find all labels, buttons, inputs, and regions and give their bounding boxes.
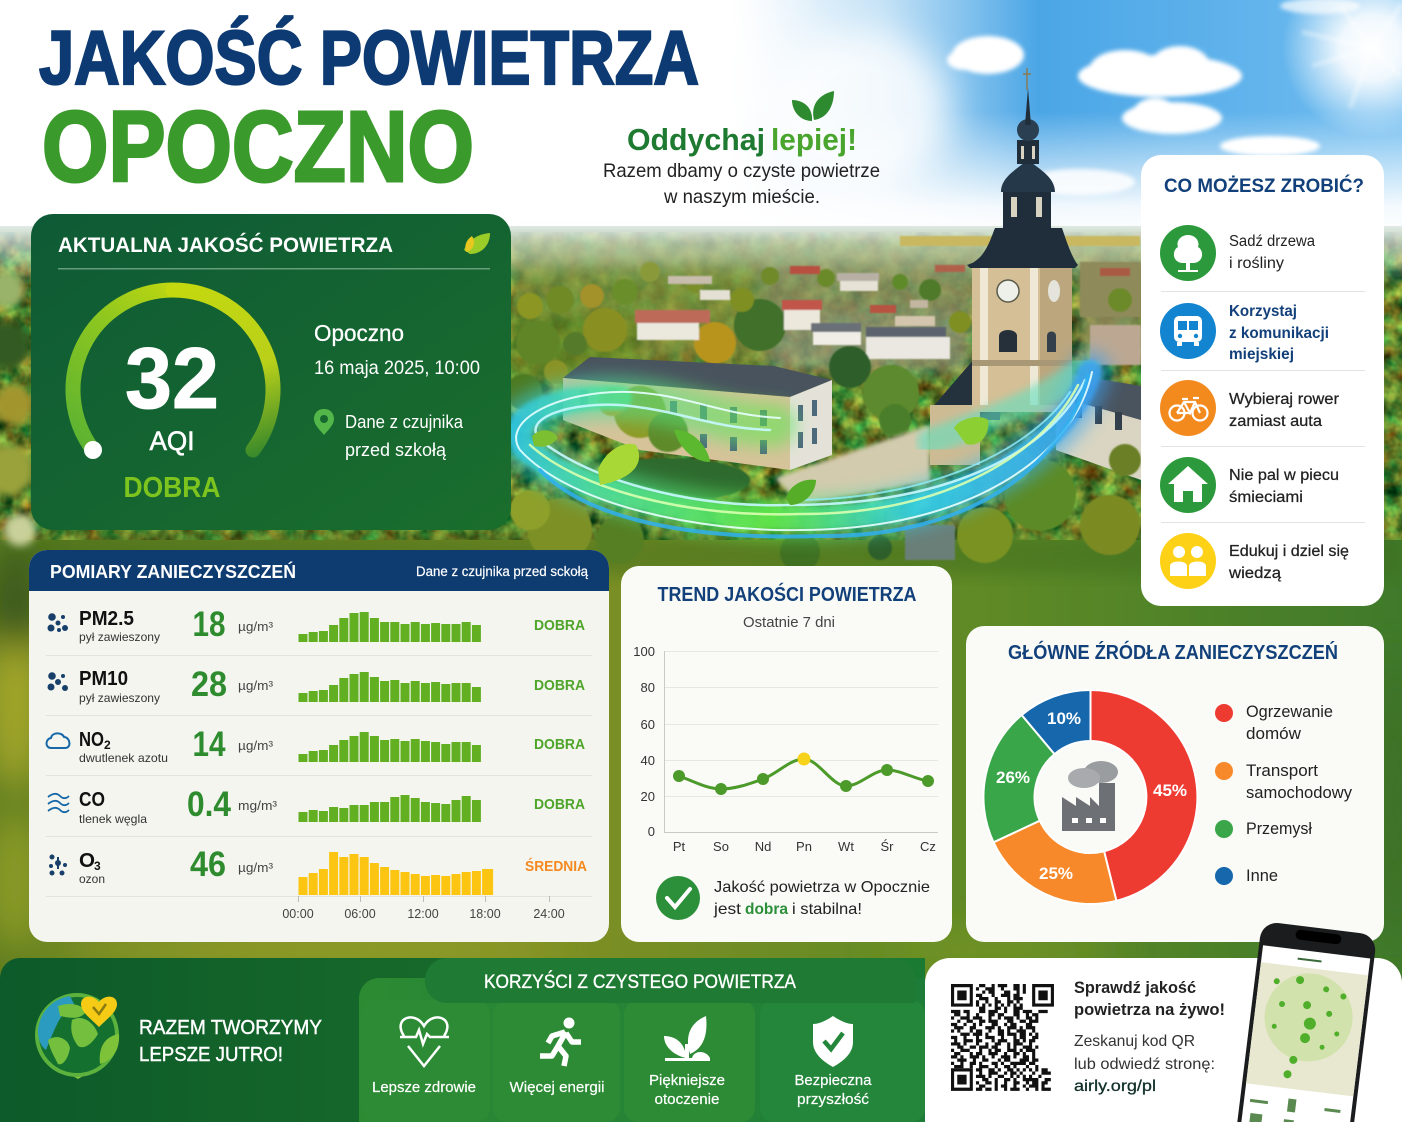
- row: PM2.5: 18: [192, 605, 226, 644]
- row: O3: ŚREDNIA: [525, 857, 587, 875]
- tip: bicycle: Wybieraj rower: [1229, 391, 1339, 408]
- time axis: 12:00: [407, 907, 439, 921]
- row: PM10: µg/m³: [238, 679, 273, 693]
- panel: pollutant measurements: Dane z czujnika przed sckołą: [416, 564, 588, 579]
- air swirl: [516, 368, 1092, 537]
- tagline: w naszym mieście.: [663, 186, 820, 208]
- time axis: 24:00: [533, 907, 565, 921]
- benefit: more energy: [510, 1018, 604, 1096]
- row: PM10: PM10: [79, 668, 128, 690]
- tagline: lepiej!: [771, 122, 857, 157]
- row: PM2.5: [48, 605, 585, 644]
- line chart: Nd: [755, 839, 771, 854]
- panel: live check QR: [925, 921, 1402, 1122]
- panel: action tips: [1141, 155, 1384, 606]
- benefit: better health: Lepsze zdrowie: [372, 1079, 476, 1096]
- clouds: [947, 0, 1360, 195]
- row: NO2: 2: [104, 738, 111, 752]
- tip: education: Edukuj i dziel się: [1229, 543, 1349, 560]
- donut chart: 45%: [1153, 781, 1187, 800]
- AQI gauge: DOBRA: [124, 472, 221, 504]
- panel: pollutant measurements: POMIARY ZANIECZYSZCZEŃ: [50, 561, 296, 582]
- benefit: safe future: [794, 1016, 872, 1108]
- line chart: Pt: [673, 839, 686, 854]
- row: CO: mg/m³: [238, 799, 277, 813]
- status note: dobra: [745, 901, 788, 918]
- legend: [1215, 703, 1353, 885]
- row: NO2: dwutlenek azotu: [79, 751, 168, 765]
- legend: samochodowy: [1246, 784, 1353, 802]
- tip: plant trees: [1160, 225, 1315, 281]
- legend: Przemysł: [1246, 820, 1312, 838]
- tip: public transport: Korzystaj: [1229, 303, 1297, 320]
- icon: earth heart: [37, 995, 119, 1079]
- legend: Inne: [1246, 867, 1278, 885]
- row: O3: ozon: [79, 872, 105, 886]
- icon: factory: [1062, 761, 1118, 831]
- row: PM10: DOBRA: [534, 677, 585, 694]
- panel: pollution sources: GŁÓWNE ŹRÓDŁA ZANIECZYSZCZEŃ: [1008, 640, 1338, 664]
- row: PM2.5: PM2.5: [79, 608, 134, 630]
- school building: [563, 357, 832, 470]
- QR text: powietrza na żywo!: [1074, 1000, 1225, 1019]
- panel: current air quality: AKTUALNA JAKOŚĆ POWIETRZA: [58, 233, 393, 257]
- panel: bottom benefits band: [0, 958, 925, 1122]
- tagline: [603, 91, 880, 208]
- panel: pollutant measurements: [29, 550, 609, 942]
- line chart: 80: [641, 680, 655, 695]
- line chart: Cz: [920, 839, 936, 854]
- title: [39, 16, 699, 203]
- QR text: Sprawdź jakość: [1074, 978, 1196, 997]
- icon: leaf: [464, 233, 490, 254]
- row: CO: CO: [79, 789, 105, 811]
- church: [930, 68, 1141, 480]
- town houses and trees: [506, 236, 1141, 436]
- AQI gauge: 32: [125, 331, 219, 427]
- landscape: [0, 226, 1402, 566]
- row: O3: 3: [94, 859, 101, 873]
- row: O3: [49, 845, 587, 895]
- panel: current air quality: [31, 214, 511, 530]
- tip: public transport: z komunikacji: [1229, 325, 1329, 342]
- panel: action tips: CO MOŻESZ ZROBIĆ?: [1164, 173, 1364, 197]
- tip: public transport: miejskiej: [1229, 346, 1294, 363]
- panel: air quality trend: Ostatnie 7 dni: [743, 615, 835, 631]
- line chart: 40: [641, 753, 655, 768]
- status note: jest: [713, 901, 742, 918]
- legend: domów: [1246, 725, 1301, 743]
- line chart: 20: [641, 789, 655, 804]
- row: PM10: pył zawieszony: [79, 691, 160, 705]
- row: PM2.5: µg/m³: [238, 620, 273, 634]
- row: O3: µg/m³: [238, 861, 273, 875]
- location info: 16 maja 2025, 10:00: [314, 357, 480, 379]
- heading tab: [425, 958, 915, 1003]
- location info: Opoczno: [314, 320, 404, 346]
- row: O3: 46: [190, 845, 226, 884]
- benefit: nicer surroundings: Piękniejsze: [649, 1072, 725, 1089]
- row: PM2.5: pył zawieszony: [79, 630, 160, 644]
- line chart: Wt: [838, 839, 854, 854]
- row: NO2: [46, 725, 585, 765]
- row: CO: DOBRA: [534, 796, 585, 813]
- benefit: nicer surroundings: otoczenie: [654, 1091, 720, 1108]
- tip: house: Nie pal w piecu: [1229, 467, 1339, 484]
- donut chart: 10%: [1047, 709, 1081, 728]
- location info: Dane z czujnika: [345, 412, 464, 432]
- phone with air quality map: [1233, 921, 1377, 1122]
- QR text: airly.org/pl: [1074, 1078, 1156, 1095]
- line chart: Śr: [880, 839, 894, 854]
- line chart: 0: [648, 824, 655, 839]
- donut chart: 26%: [996, 768, 1030, 787]
- benefit cards background: [361, 1000, 925, 1122]
- donut chart: [983, 690, 1197, 904]
- status note: Jakość powietrza w Opocznie: [714, 879, 930, 896]
- row: CO: 0.4: [187, 785, 231, 824]
- title: JAKOŚĆ POWIETRZA: [39, 16, 699, 101]
- title: OPOCZNO: [42, 91, 474, 203]
- tip: education: wiedzą: [1228, 565, 1281, 582]
- time axis: 06:00: [344, 907, 376, 921]
- line chart: So: [713, 839, 729, 854]
- line chart: [633, 644, 938, 854]
- falling leaves: [532, 417, 988, 505]
- QR text: lub odwiedź stronę:: [1074, 1056, 1215, 1073]
- tip: bicycle: [1160, 380, 1339, 436]
- tagline: Razem dbamy o czyste powietrze: [603, 160, 880, 182]
- row: PM2.5: DOBRA: [534, 617, 585, 634]
- courtyard trees: [590, 386, 750, 502]
- benefit: safe future: przyszłość: [797, 1091, 870, 1108]
- row: NO2: 14: [192, 725, 226, 764]
- legend: Transport: [1246, 762, 1318, 780]
- AQI gauge: AQI: [150, 426, 194, 456]
- panel: bottom benefits band: RAZEM TWORZYMY: [139, 1017, 322, 1039]
- location info: [314, 320, 480, 460]
- time axis: 18:00: [469, 907, 501, 921]
- row: O3: O: [79, 850, 95, 872]
- AQI gauge: [73, 290, 273, 504]
- QR code: [951, 984, 1054, 1091]
- row: NO2: µg/m³: [238, 739, 273, 753]
- panel: pollution sources: [966, 626, 1384, 942]
- benefit: safe future: Bezpieczna: [794, 1072, 872, 1089]
- row: NO2: DOBRA: [534, 736, 585, 753]
- tip: public transport: [1160, 303, 1329, 363]
- status note: [656, 876, 930, 920]
- tip: house: śmieciami: [1229, 489, 1303, 506]
- legend: Ogrzewanie: [1246, 703, 1333, 721]
- town: tree and roof tones: [511, 240, 1141, 382]
- status note: i stabilna!: [792, 901, 862, 918]
- time axis: 00:00: [282, 907, 314, 921]
- row: PM10: [48, 665, 585, 705]
- heading tab: KORZYŚCI Z CZYSTEGO POWIETRZA: [484, 971, 796, 993]
- line chart: Pn: [796, 839, 812, 854]
- panel: bottom benefits band: LEPSZE JUTRO!: [139, 1044, 283, 1066]
- line chart: 60: [641, 717, 655, 732]
- benefit: more energy: Więcej energii: [510, 1079, 604, 1096]
- row: CO: tlenek węgla: [79, 812, 147, 826]
- left trees: [0, 272, 36, 546]
- time axis: [282, 896, 565, 921]
- tip: education: [1160, 533, 1349, 589]
- QR text: [1074, 978, 1225, 1095]
- location info: przed szkołą: [345, 440, 447, 460]
- courtyard ground: [775, 425, 930, 505]
- icon: green leaves: [792, 91, 834, 121]
- tip: plant trees: Sadź drzewa: [1229, 233, 1315, 250]
- tagline: Oddychaj: [627, 122, 765, 157]
- foreground trees: [510, 444, 1141, 572]
- panel: air quality trend: [621, 566, 952, 942]
- benefit: nicer surroundings: [649, 1016, 725, 1108]
- benefit: better health: [372, 1017, 476, 1096]
- tip: house: [1160, 457, 1339, 513]
- row: NO2: NO: [79, 729, 104, 751]
- QR text: Zeskanuj kod QR: [1074, 1033, 1195, 1050]
- row: PM10: 28: [191, 665, 227, 704]
- line chart: 100: [633, 644, 655, 659]
- sun: [1282, 0, 1402, 138]
- tip: bicycle: zamiast auta: [1229, 413, 1322, 430]
- panel: air quality trend: TREND JAKOŚCI POWIETRZA: [658, 582, 916, 606]
- donut chart: 25%: [1039, 864, 1073, 883]
- icon: map pin: [314, 409, 334, 435]
- tip: plant trees: i rośliny: [1229, 255, 1284, 272]
- row: CO: [48, 785, 585, 826]
